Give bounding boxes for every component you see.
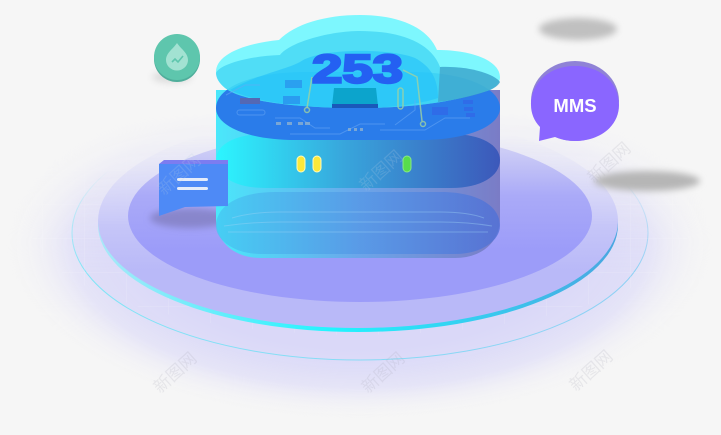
cloud front layer — [216, 31, 500, 108]
watermarks over tower: 新图网 — [154, 151, 205, 199]
lower section lines — [224, 212, 492, 232]
gold traces — [304, 70, 426, 126]
indicator lights — [297, 156, 411, 172]
MMS speech bubble: MMS — [553, 95, 597, 116]
watermarks: 新图网 — [566, 347, 617, 395]
tower body — [216, 90, 500, 258]
circuit board layer — [216, 72, 500, 140]
logo: 253: 253 — [312, 48, 403, 92]
chat bubble — [159, 160, 228, 216]
middle band — [216, 134, 500, 188]
chat bubble lines — [177, 178, 208, 190]
right cloud shade — [438, 67, 500, 102]
grid texture — [72, 204, 648, 278]
cloud inner highlight over board — [230, 51, 438, 108]
small chips — [283, 80, 302, 104]
circuit components — [240, 98, 475, 117]
watermarks over tower: 新图网 — [356, 147, 407, 195]
inner disc — [128, 130, 592, 302]
watermarks over tower — [154, 147, 407, 199]
chip — [332, 88, 378, 108]
watermarks: 新图网 — [584, 139, 635, 187]
shadow: chat bubble — [150, 208, 230, 228]
circuit dots — [276, 122, 363, 131]
shadow: drop badge — [152, 71, 192, 83]
icon: drop badge — [154, 34, 200, 82]
glow behind discs — [47, 154, 674, 399]
server tower — [216, 90, 500, 258]
shadow: top right — [539, 18, 617, 40]
watermarks: 新图网 — [150, 349, 201, 397]
icon: water drop — [166, 43, 188, 70]
watermarks — [150, 139, 635, 397]
MMS speech bubble — [531, 61, 619, 141]
lower section — [216, 192, 500, 254]
outer ring — [72, 178, 648, 360]
watermarks: 新图网 — [358, 349, 409, 397]
circuit traces — [226, 85, 470, 134]
cloud back layer — [216, 15, 500, 108]
shadow: right — [594, 171, 700, 191]
middle disc with cyan rim — [98, 168, 618, 332]
